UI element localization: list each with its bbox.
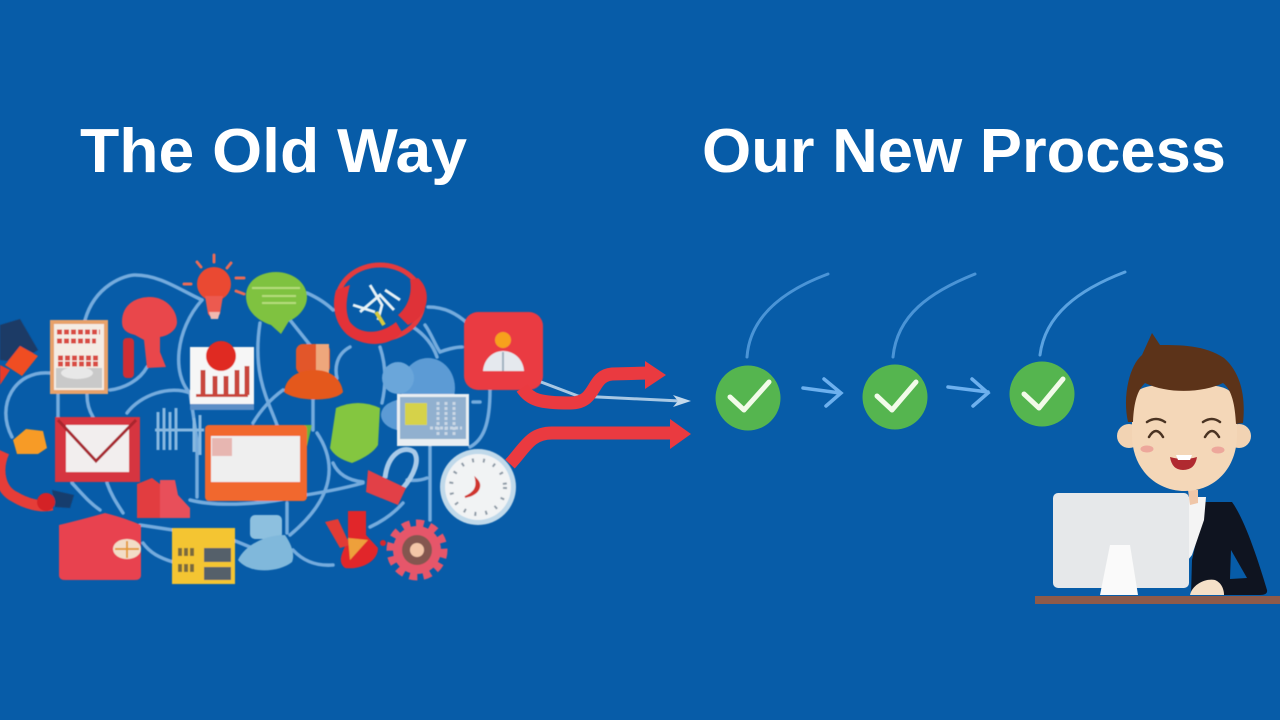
blue cloud behind laptop [381, 358, 455, 431]
tangled connector lines [6, 275, 490, 565]
icon: bar chart card with red circle [190, 341, 254, 410]
icon: orange screen [205, 425, 307, 501]
shirt [1188, 497, 1206, 560]
curve to step 1 [747, 274, 828, 357]
face [1132, 385, 1237, 491]
icon: red wallet [59, 513, 141, 580]
icon: green cylinder [304, 403, 380, 463]
step arrow 2 [948, 379, 988, 406]
suit [1191, 502, 1267, 595]
icon: dark and orange shape at left edge [0, 319, 38, 385]
hair [1126, 333, 1244, 424]
icon: red mushroom shape [122, 297, 177, 378]
title: Our New Process: Our New Process [702, 117, 1226, 186]
title: The Old Way: The Old Way [80, 117, 468, 186]
icon: envelope [55, 417, 140, 482]
check circle 2 [862, 364, 928, 430]
icon: document card [50, 320, 108, 394]
illustration: tangled old way [0, 255, 543, 584]
illustration: smiling man at computer [1035, 333, 1280, 604]
check circle 3 [1010, 362, 1074, 426]
step arrow 1 [803, 379, 841, 406]
icon: clock [440, 449, 516, 525]
desk [1035, 596, 1280, 604]
red wavy arrow [522, 361, 666, 403]
icon: red flask [325, 511, 378, 568]
check circle 1 [716, 366, 780, 430]
curve to step 2 [893, 274, 975, 357]
steps: new process [716, 272, 1125, 430]
icon: red ring with tangled white lines [334, 265, 427, 344]
icon: gear [390, 523, 444, 577]
curve to step 3 [1040, 272, 1125, 355]
icon: pale blue stack [238, 515, 293, 570]
icon: red and orange chain at left [0, 429, 74, 511]
hand [1190, 580, 1224, 595]
icon: orange funnel shape [284, 344, 343, 400]
icon: light bulb [184, 255, 244, 319]
thin arrow [541, 382, 691, 407]
icon: red blocks [137, 478, 190, 518]
icon: padlock [366, 449, 416, 505]
icon: green speech bubble [246, 272, 307, 334]
monitor stand [1100, 545, 1138, 595]
mouth [1170, 455, 1197, 470]
ears [1117, 424, 1251, 448]
faded blue chart [155, 408, 204, 455]
icon: laptop [397, 394, 469, 446]
red curved arrow [510, 419, 691, 464]
eyes [1147, 419, 1220, 437]
icon: red profile badge [464, 312, 543, 390]
monitor [1053, 493, 1189, 588]
icon: yellow table card [172, 528, 235, 584]
cheeks [1140, 446, 1224, 454]
